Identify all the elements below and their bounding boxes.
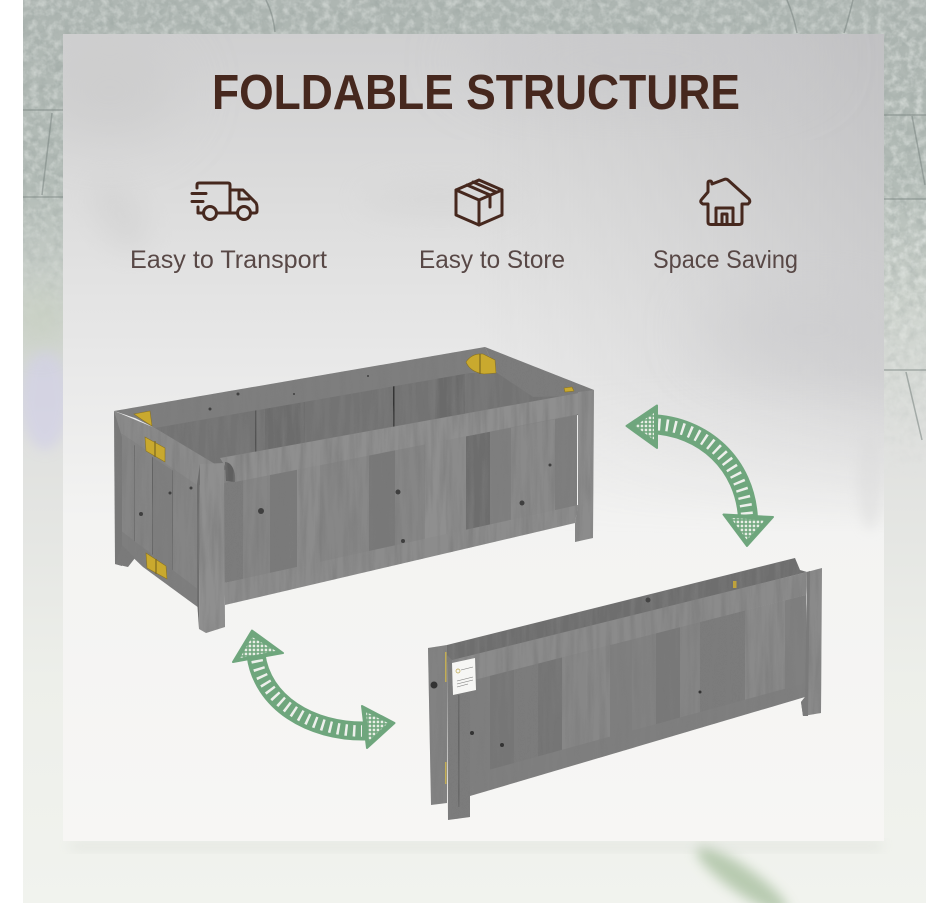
icon: cardboard box (456, 180, 502, 225)
interior back wall (150, 370, 578, 485)
icon: delivery truck (192, 183, 257, 220)
arrow: lower curved double-headed arrow (233, 630, 394, 748)
left top rail (114, 411, 215, 485)
rear left post (428, 645, 447, 805)
front top rail (220, 393, 579, 482)
front plank panel (224, 410, 577, 583)
back rim rail (114, 347, 497, 428)
right post (575, 390, 594, 542)
knots on planks (139, 375, 552, 543)
knots and fittings (430, 581, 736, 784)
front bottom rail (224, 505, 578, 605)
metal hinges (134, 354, 574, 579)
left corner post (114, 411, 122, 566)
label: easy to store: Easy to Store (419, 246, 565, 274)
product: assembled grey wooden planter (114, 347, 594, 633)
label: space saving: Space Saving (653, 246, 798, 274)
product: folded grey wooden planter (428, 558, 822, 820)
top rail (452, 572, 807, 686)
right post (801, 568, 822, 716)
feature: easy to transport (130, 183, 327, 274)
feature: easy to store (419, 180, 565, 274)
arrow: upper curved double-headed arrow (626, 406, 773, 546)
plank panel (470, 595, 806, 776)
left side face (117, 430, 199, 600)
product label sticker (452, 658, 476, 695)
title: FOLDABLE STRUCTURE (212, 66, 740, 120)
front left post (199, 463, 225, 633)
right side rim rail (485, 347, 594, 397)
front left post (447, 655, 470, 820)
label: easy to transport: Easy to Transport (130, 246, 327, 274)
left bottom rail (120, 530, 199, 608)
feature: space saving (653, 179, 798, 274)
icon: house (701, 179, 750, 224)
bottom rail (470, 683, 806, 796)
rear folded panel top (447, 558, 807, 662)
